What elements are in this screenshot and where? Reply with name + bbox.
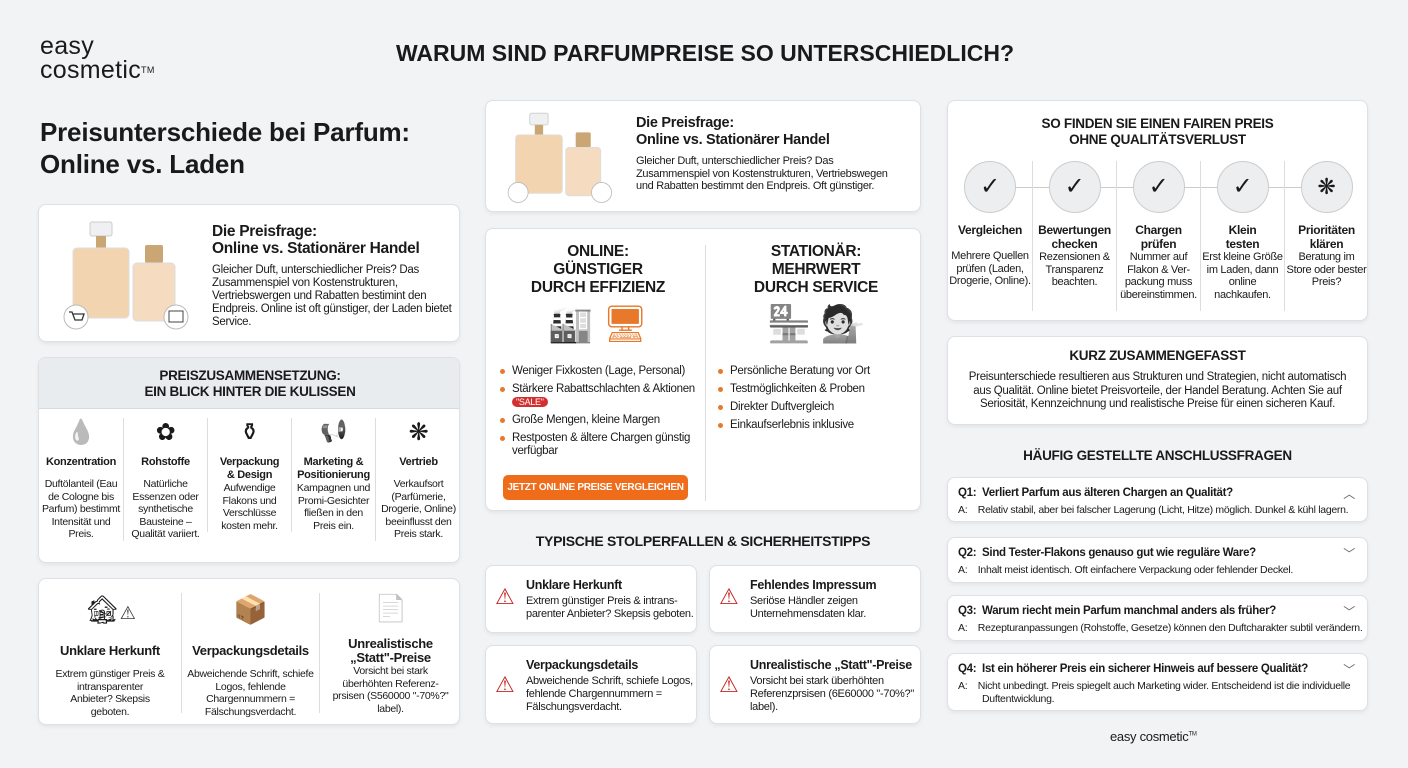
panel: fairer Preis: ✓ bbox=[1233, 173, 1252, 200]
text: Q4: Ist ein höherer Preis ein sicherer Hinweis auf bessere Qualität? bbox=[958, 663, 1308, 675]
column: stationär: MEHRWERT bbox=[772, 261, 860, 278]
text bbox=[636, 115, 888, 192]
text: Preisfrage: Gleicher Duft, unterschiedlicher Preis? Das Zusammenspiel von Kostenstrukturen, Vertriebswergen und Rabatten bestimint den Endpreis. Online ist oft günstiger, der Laden bietet Service. bbox=[212, 264, 451, 328]
column: stationär: STATIONÄR: bbox=[771, 243, 861, 260]
columns: 💧 bbox=[66, 419, 96, 446]
column: stationär: DURCH SERVICE bbox=[754, 279, 878, 296]
text: Q3: Warum riecht mein Parfum manchmal anders als früher? bbox=[958, 605, 1276, 617]
left heading: Preisunterschiede bei Parfum: bbox=[40, 117, 410, 147]
logo: easy bbox=[40, 32, 94, 60]
columns: Rohstoffe bbox=[141, 456, 190, 468]
columns: Positionierung bbox=[297, 469, 370, 481]
FAQ items: ︿ bbox=[1343, 487, 1355, 501]
columns: & Design bbox=[227, 469, 272, 481]
panel: warning left bottom: Vorsicht bei stark überhöhten Referenz-prsisen (S560000 "-70%?" label). bbox=[333, 665, 448, 714]
panel: fairer Preis bbox=[947, 100, 1368, 321]
panel: Kurz zusammengefasst: Preisunterschiede resultieren aus Strukturen und Strategien, nicht automatisch aus Qualität. Online bietet Preisvorteile, der Handel Beratung. Achten Sie auf Seriosität, Kennzeichnung und realistische Preise für einen sicheren Kauf. bbox=[969, 371, 1346, 410]
text: Q2: Sind Tester-Flakons genauso gut wie reguläre Ware? bbox=[958, 547, 1256, 559]
text: A: Nicht unbedingt. Preis spiegelt auch Marketing wider. Entscheidend ist die individuelle Duftentwicklung. bbox=[958, 680, 1350, 705]
text: ⚠ bbox=[719, 672, 738, 697]
panel: fairer Preis: Vergleichen bbox=[958, 223, 1022, 237]
columns: Verpackung bbox=[220, 456, 279, 468]
text: A: Rezepturanpassungen (Rohstoffe, Gesetze) können den Duftcharakter subtil verändern. bbox=[958, 622, 1362, 634]
panel: Kurz zusammengefasst bbox=[947, 336, 1368, 425]
column: stationär: 🏪 💁 bbox=[767, 303, 865, 344]
column: online: GÜNSTIGER bbox=[553, 261, 643, 278]
panel: fairer Preis: Beratung im Store oder bester Preis? bbox=[1287, 251, 1366, 288]
heading: EIN BLICK HINTER DIE KULISSEN bbox=[144, 384, 356, 399]
panel: warning left bottom: 📦 bbox=[233, 594, 268, 625]
column: online: Restposten & ältere Chargen günstig verfügbar bbox=[512, 432, 690, 457]
left heading: Online vs. Laden bbox=[40, 149, 245, 179]
heading bbox=[39, 358, 461, 409]
panel: fairer Preis: klären bbox=[1310, 237, 1343, 251]
icon: perfume bottles bbox=[508, 112, 612, 203]
panel: fairer Preis: checken bbox=[1052, 237, 1097, 251]
panel: fairer Preis: Erst kleine Größe im Laden, dann online nachkaufen. bbox=[1202, 251, 1283, 300]
column: online: ONLINE: bbox=[567, 243, 629, 260]
columns: Aufwendige Flakons und Verschlüsse kosten mehr. bbox=[221, 482, 278, 532]
columns: 📢 bbox=[320, 418, 347, 443]
text: Gleicher Duft, unterschiedlicher Preis? Das Zusammenspiel von Kostenstrukturen, Vertriebswegen und Rabatten bestimmt den Endpreis. Oft günstiger. bbox=[636, 155, 888, 192]
panel: fairer Preis: Rezensionen & Transparenz beachten. bbox=[1039, 251, 1110, 288]
left heading bbox=[40, 117, 410, 179]
panel: fairer Preis: testen bbox=[1226, 237, 1259, 251]
columns: ✿ bbox=[156, 419, 175, 446]
panel: warning left bottom: 📄 bbox=[374, 593, 407, 623]
panel: Preisfrage middle bbox=[485, 100, 921, 212]
icon: perfume bottles bbox=[64, 222, 188, 330]
pitfall cards: Unklare Herkunft bbox=[526, 578, 622, 592]
panel: warning left bottom: „Statt"-Preise bbox=[350, 650, 431, 665]
panel: fairer Preis: OHNE QUALITÄTSVERLUST bbox=[1069, 132, 1246, 147]
panel: fairer Preis: Mehrere Quellen prüfen (Laden, Drogerie, Online). bbox=[949, 250, 1031, 287]
title: WARUM SIND PARFUMPREISE SO UNTERSCHIEDLICH? bbox=[396, 40, 1014, 66]
column: online: Weniger Fixkosten (Lage, Personal) bbox=[512, 365, 685, 377]
logo: cosmeticTM bbox=[40, 56, 155, 84]
heading: PREISZUSAMMENSETZUNG: bbox=[159, 368, 341, 383]
pitfall cards: ⚠ bbox=[495, 584, 514, 609]
panel: Preiszusammensetzung bbox=[38, 357, 460, 563]
column: online bbox=[500, 243, 695, 500]
panel: warning left bottom: 🏚⚠ bbox=[84, 594, 136, 625]
columns: ⚱ bbox=[240, 419, 259, 446]
panel: fairer Preis: Prioritäten bbox=[1298, 223, 1355, 237]
panel: fairer Preis: Nummer auf Flakon & Ver-packung muss übereinstimmen. bbox=[1120, 251, 1197, 300]
column: stationär bbox=[718, 242, 878, 431]
column: stationär: Testmöglichkeiten & Proben bbox=[730, 383, 865, 395]
FAQ items bbox=[947, 477, 1368, 522]
panel: fairer Preis: SO FINDEN SIE EINEN FAIREN PREIS bbox=[1042, 116, 1273, 131]
text: Preisfrage: Online vs. Stationärer Handel bbox=[212, 240, 420, 257]
column: stationär: Persönliche Beratung vor Ort bbox=[730, 365, 870, 377]
panel: warning left bottom: Unrealistische bbox=[348, 636, 433, 651]
column: online: Große Mengen, kleine Margen bbox=[512, 414, 660, 426]
FAQ items: Q1: Verliert Parfum aus älteren Chargen an Qualität? bbox=[958, 487, 1233, 499]
text: Preisfrage: Die Preisfrage: bbox=[212, 223, 317, 240]
text: ⚠ bbox=[719, 584, 738, 609]
columns: Natürliche Essenzen oder synthetische Bausteine – Qualität variiert. bbox=[131, 478, 200, 540]
columns bbox=[42, 418, 456, 541]
text: Fehlendes Impressum bbox=[750, 578, 876, 592]
column: stationär: Direkter Duftvergleich bbox=[730, 401, 834, 413]
heading: Stolperfallen: TYPISCHE STOLPERFALLEN & SICHERHEITSTIPPS bbox=[536, 533, 870, 549]
panel: warning left bottom: Abweichende Schrift, schiefe Logos, fehlende Chargennummern = Fälschungsverdacht. bbox=[187, 668, 314, 718]
panel: warning left bottom: Verpackungsdetails bbox=[192, 643, 309, 658]
columns: Duftölanteil (Eau de Cologne bis Parfum) bestimmt Intensität und Preis. bbox=[42, 478, 120, 540]
footer logo: easy cosmeticTM bbox=[1110, 729, 1197, 744]
panel: fairer Preis: Bewertungen bbox=[1038, 223, 1111, 237]
panel: warning left bottom: Extrem günstiger Preis & intransparenter Anbieter? Skepsis geboten. bbox=[56, 668, 164, 718]
panel: fairer Preis: Chargen bbox=[1135, 223, 1182, 237]
column: stationär: Einkaufserlebnis inklusive bbox=[730, 419, 854, 431]
text: Verpackungsdetails bbox=[526, 658, 638, 672]
columns: Konzentration bbox=[46, 456, 116, 468]
FAQ items: A: Relativ stabil, aber bei falscher Lagerung (Licht, Hitze) möglich. Dunkel & kühl lagern. bbox=[958, 504, 1348, 516]
panel: online vs stationär bbox=[485, 228, 921, 511]
columns: ❋ bbox=[409, 419, 428, 446]
text: Die Preisfrage: bbox=[636, 115, 734, 131]
button: JETZT ONLINE PREISE VERGLEICHEN bbox=[507, 482, 684, 493]
panel: warning left bottom bbox=[38, 578, 460, 725]
text: Online vs. Stationärer Handel bbox=[636, 132, 830, 148]
text: ﹀ bbox=[1343, 547, 1355, 561]
columns: Vertrieb bbox=[399, 456, 438, 468]
panel: warning left bottom: Unklare Herkunft bbox=[60, 643, 160, 658]
panel: fairer Preis: prüfen bbox=[1141, 237, 1176, 251]
text: Vorsicht bei stark überhöhten Referenzprsisen (6E60000 "-70%?" label). bbox=[750, 675, 914, 713]
heading: FAQ: HÄUFIG GESTELLTE ANSCHLUSSFRAGEN bbox=[1023, 448, 1292, 463]
text: ﹀ bbox=[1343, 605, 1355, 619]
panel: Kurz zusammengefasst: KURZ ZUSAMMENGEFASST bbox=[1069, 348, 1246, 363]
panel: fairer Preis: ✓ bbox=[980, 173, 1000, 200]
column: online: DURCH EFFIZIENZ bbox=[531, 279, 665, 296]
text: Seriöse Händler zeigen Unternehmensdaten klar. bbox=[750, 595, 866, 620]
panel: fairer Preis: ✓ bbox=[1149, 173, 1168, 200]
column: online: Stärkere Rabattschlachten & Aktionen "SALE" bbox=[512, 383, 695, 407]
columns: Kampagnen und Promi-Gesichter fließen in den Preis ein. bbox=[297, 482, 370, 532]
text: A: Inhalt meist identisch. Oft einfachere Verpackung oder fehlender Deckel. bbox=[958, 564, 1293, 576]
text: Preisfrage bbox=[212, 223, 452, 328]
column: online: 🏭 🖥 bbox=[548, 303, 648, 344]
text: Unrealistische „Statt"-Preise bbox=[750, 658, 912, 672]
logo bbox=[40, 32, 155, 84]
panel: fairer Preis: ✓ bbox=[1065, 173, 1084, 200]
columns: Marketing & bbox=[304, 456, 363, 468]
button bbox=[503, 475, 688, 500]
panel: fairer Preis: Klein bbox=[1229, 223, 1256, 237]
pitfall cards: Extrem günstiger Preis & intrans-parenter Anbieter? Skepsis geboten. bbox=[526, 595, 693, 620]
text: Abweichende Schrift, schiefe Logos, fehlende Chargennummern = Fälschungsverdacht. bbox=[526, 675, 693, 713]
pitfall cards bbox=[485, 565, 697, 633]
text: ﹀ bbox=[1343, 663, 1355, 677]
panel: Preisfrage left bbox=[38, 204, 460, 342]
text: ⚠ bbox=[495, 672, 514, 697]
columns: Verkaufsort (Parfümerie, Drogerie, Online) beeinflusst den Preis stark. bbox=[381, 478, 456, 540]
panel: fairer Preis: ❋ bbox=[1317, 174, 1336, 199]
